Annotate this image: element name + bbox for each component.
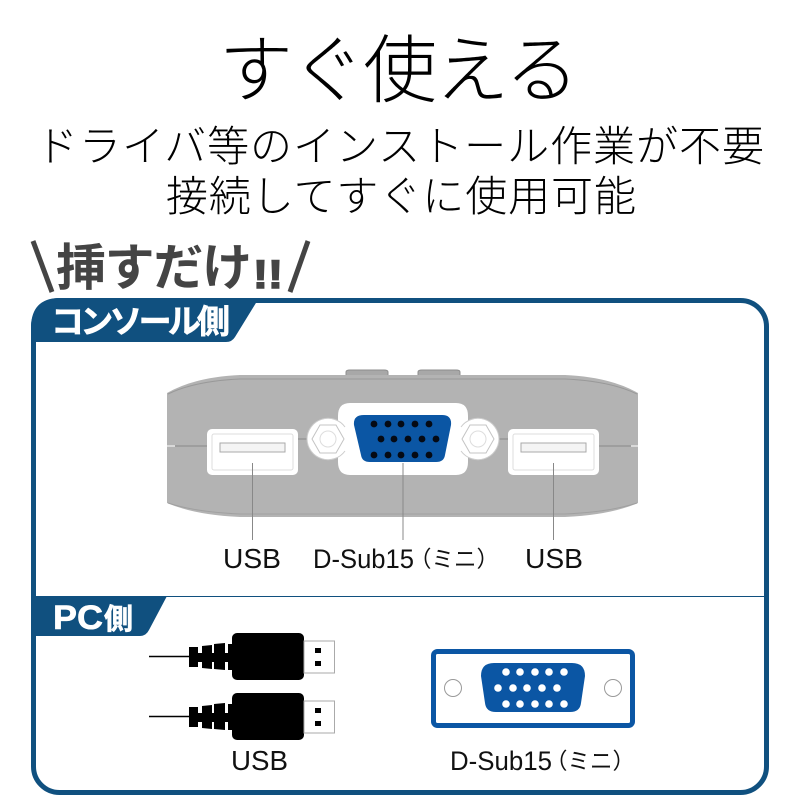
PC side tab: PC bbox=[53, 599, 103, 637]
switch buttons bbox=[346, 370, 460, 376]
console side tab bbox=[31, 298, 259, 342]
label: USB right: USB bbox=[525, 543, 583, 574]
title: すぐ使える bbox=[219, 29, 579, 112]
usb port left bbox=[207, 429, 298, 475]
icon: vga connector bbox=[434, 652, 632, 726]
console side tab: コンソール側 bbox=[51, 303, 230, 340]
subtitle line 2: 接続してすぐに使用可能 bbox=[166, 173, 636, 220]
label: D-Sub15 mini pc: D-Sub15 bbox=[450, 746, 552, 776]
PC side tab: 側 bbox=[104, 603, 133, 636]
usb port right bbox=[508, 429, 599, 475]
vga port bbox=[307, 403, 499, 475]
label: USB pc: USB bbox=[231, 745, 288, 776]
icon: usb plug bottom bbox=[149, 693, 334, 740]
label: D-Sub15 mini: D-Sub15 bbox=[313, 544, 414, 574]
leader lines bbox=[252, 463, 554, 540]
label: D-Sub15 mini pc bbox=[450, 746, 635, 776]
label: D-Sub15 mini: （ミニ） bbox=[409, 547, 499, 572]
panel outline bbox=[34, 300, 766, 792]
device body bbox=[167, 375, 638, 517]
label: USB left: USB bbox=[223, 543, 281, 574]
heading: just plug in: !! bbox=[253, 253, 283, 297]
icon: usb plug top bbox=[149, 633, 334, 680]
label: D-Sub15 mini bbox=[313, 544, 499, 574]
subtitle line 1: ドライバ等のインストール作業が不要 bbox=[36, 123, 764, 170]
divider bbox=[33, 596, 767, 598]
label: D-Sub15 mini pc: （ミニ） bbox=[545, 749, 635, 774]
device: KVM switch front bbox=[167, 370, 638, 540]
PC side tab bbox=[33, 596, 167, 637]
heading: just plug in: 挿すだけ bbox=[56, 240, 252, 296]
